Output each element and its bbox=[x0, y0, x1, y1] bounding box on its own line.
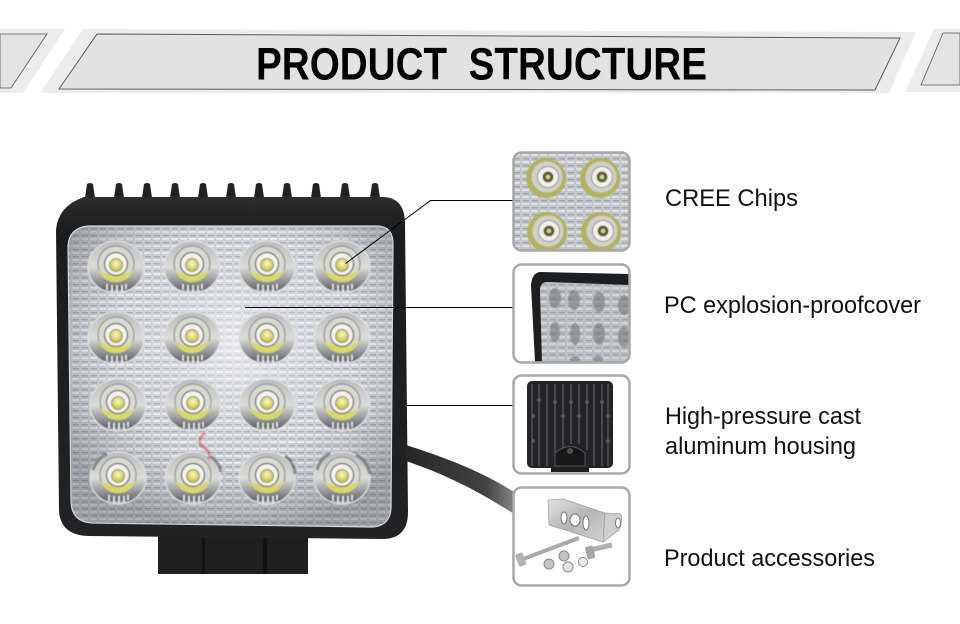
LED work light product photo bbox=[56, 183, 408, 574]
label: PC cover: PC explosion-proofcover bbox=[664, 292, 921, 319]
leader line: CREE chips bbox=[346, 200, 513, 264]
mounting base bbox=[158, 530, 308, 574]
bottom row lens shadows bbox=[93, 454, 370, 474]
bolts and nuts bbox=[515, 538, 612, 572]
thumbnail: CREE chips bbox=[514, 152, 630, 252]
label: aluminum housing bbox=[665, 403, 861, 460]
label: accessories: Product accessories bbox=[664, 545, 875, 572]
label: CREE chips: CREE Chips bbox=[665, 185, 798, 212]
leader line: PC cover bbox=[245, 306, 513, 308]
cable bbox=[406, 445, 514, 514]
red reflection mark bbox=[199, 433, 209, 459]
lens array bbox=[88, 241, 370, 504]
thumbnail: accessories bbox=[514, 488, 630, 586]
banner: right fragment bbox=[905, 29, 960, 92]
lens panel bbox=[68, 226, 393, 527]
thumbnail: aluminum housing bbox=[514, 376, 630, 474]
banner: left fragment bbox=[0, 29, 65, 93]
title: PRODUCT STRUCTURE bbox=[256, 38, 707, 90]
label: aluminum housing: High-pressure cast bbox=[665, 403, 861, 430]
cooling fins bbox=[85, 183, 380, 198]
housing bbox=[56, 197, 408, 539]
thumbnail: PC cover bbox=[514, 264, 630, 364]
leader line: housing bbox=[407, 404, 513, 406]
bracket bbox=[548, 499, 622, 542]
banner: title plate bbox=[40, 29, 916, 93]
label: aluminum housing: aluminum housing bbox=[665, 433, 856, 460]
